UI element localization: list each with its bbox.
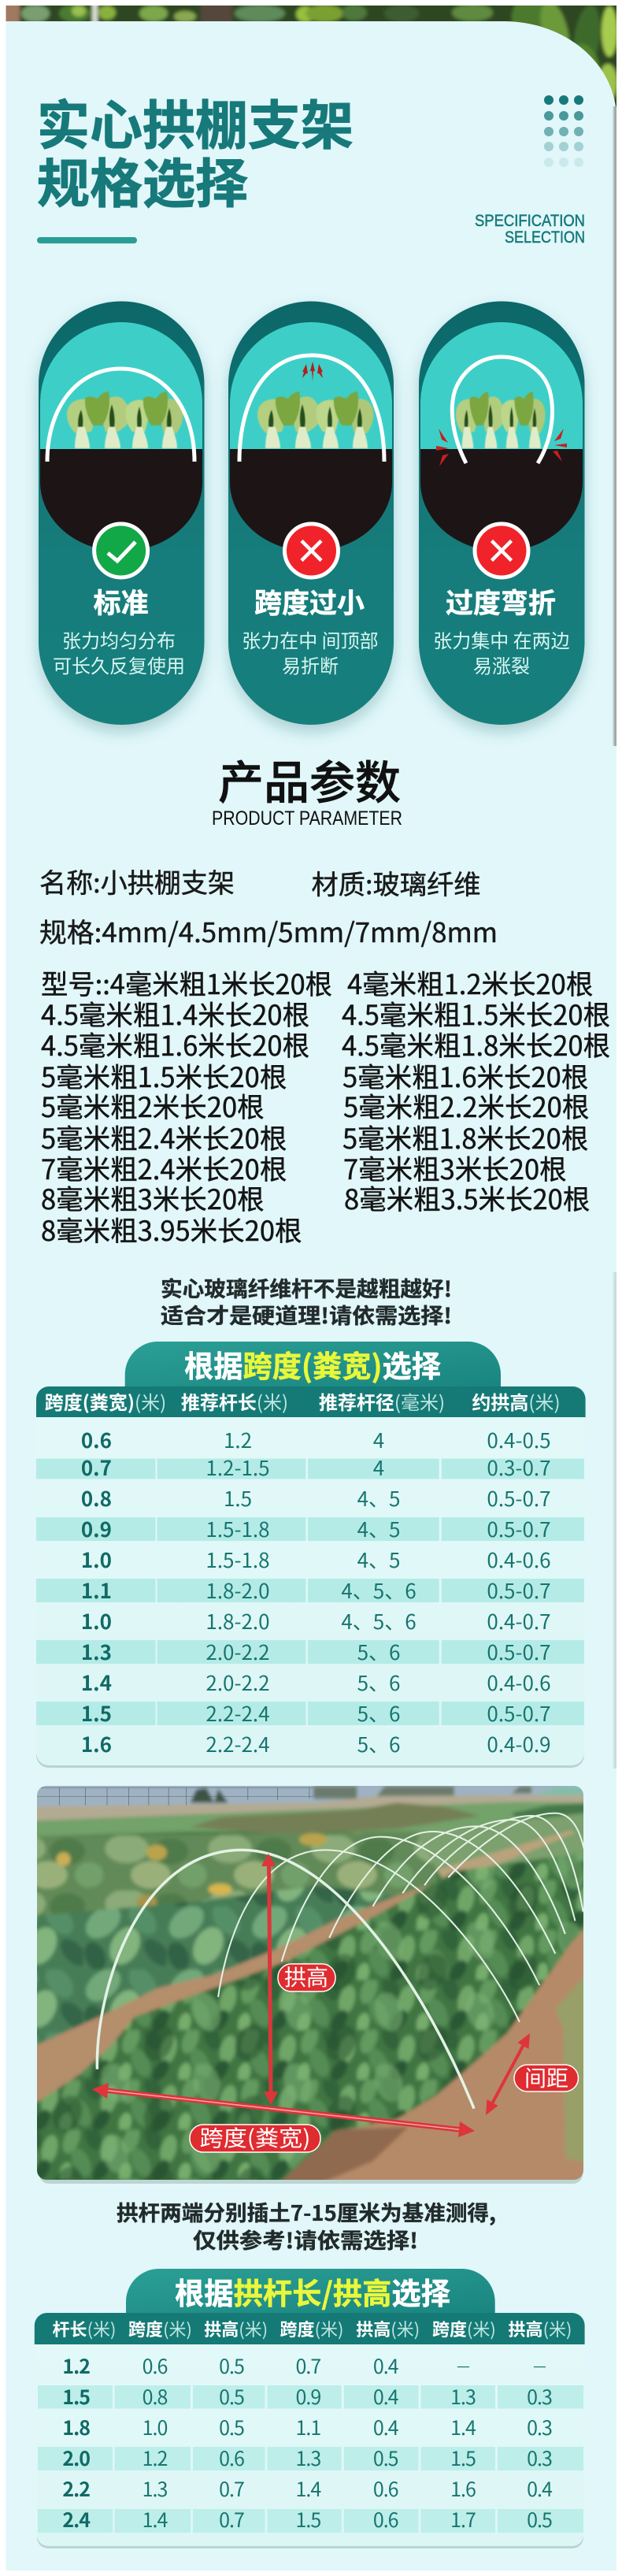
table rows: 4、5、6 [341, 1576, 417, 1605]
table rows: 1.5 [450, 2444, 476, 2472]
table rows: 1.6 [81, 1729, 112, 1758]
tab heading: 根据跨度(粪宽)选择 [184, 1342, 441, 1386]
text: span too small description: 张力在中 间顶部 [242, 625, 379, 653]
english subtitle: SELECTION [505, 228, 585, 247]
table rows: 0.4 [373, 2382, 399, 2411]
table rows: 0.4 [527, 2474, 553, 2503]
table rows: 2.0-2.2 [205, 1668, 270, 1697]
table rows: — [533, 2355, 546, 2376]
english subtitle: SPECIFICATION [475, 212, 585, 230]
table rows: 5、6 [357, 1729, 400, 1758]
arrow: spacing [486, 2033, 530, 2115]
table rows: 0.7 [219, 2505, 244, 2533]
table rows: 0.7 [219, 2474, 244, 2503]
heading: product parameters: 产品参数 [218, 746, 401, 812]
icon: bok choy plants [257, 392, 373, 448]
table header: 跨度(米) [128, 2316, 192, 2341]
table rows: 0.6 [81, 1425, 112, 1454]
table rows: 1.3 [450, 2382, 476, 2411]
table header: 约拱高(米) [472, 1387, 561, 1415]
text block: model list: 型号::4毫米粗1米长20根 [41, 963, 332, 1002]
table rows: 1.2 [143, 2444, 167, 2472]
table rows: 1.4 [450, 2413, 476, 2441]
arch: over-bent curve [452, 357, 553, 463]
table rows: 0.4 [373, 2351, 399, 2380]
text block: product specs [39, 862, 498, 950]
arrow: span width [92, 2083, 475, 2137]
table rows: 1.4 [81, 1668, 112, 1697]
table rows: 5、6 [357, 1668, 400, 1697]
text: over bending description: 易涨裂 [473, 651, 530, 678]
table header [35, 2313, 585, 2344]
text: over bending description [433, 625, 570, 678]
text: over bending description: 张力集中 在两边 [433, 625, 570, 653]
tab heading [125, 1342, 501, 1386]
table: selection by rod length and arch height [35, 2269, 585, 2548]
icon: bok choy plants [67, 392, 183, 448]
arch: even curve [47, 369, 194, 462]
table rows: 2.4 [62, 2505, 91, 2533]
callout: measurement note: 仅供参考!请依需选择! [193, 2224, 418, 2255]
table card [37, 2340, 583, 2548]
table rows: 4 [373, 1453, 384, 1482]
title [37, 84, 354, 218]
table rows: 1.0 [81, 1606, 112, 1635]
table rows: 1.8 [62, 2413, 90, 2441]
callout: measurement note [117, 2196, 496, 2255]
text block: model list: 5毫米粗2.4米长20根 [41, 1117, 287, 1156]
table rows: 0.4-0.5 [487, 1425, 551, 1454]
table rows: 1.0 [81, 1545, 112, 1574]
table rows: 4、5 [357, 1514, 400, 1543]
row bands [38, 2385, 583, 2533]
text block: model list: 5毫米粗1.6米长20根 [342, 1056, 588, 1095]
arrow: arch height [261, 1854, 278, 2105]
table header: 跨度(米) [280, 2316, 343, 2341]
callout: thickness note: 实心玻璃纤维杆不是越粗越好! [161, 1272, 452, 1303]
table header [36, 1386, 586, 1417]
table rows: 0.7 [296, 2351, 320, 2380]
table rows: 0.6 [143, 2351, 167, 2380]
icon: red stress arrows at top [302, 362, 323, 381]
table rows: 0.3 [527, 2413, 552, 2441]
table rows: 0.3-0.7 [487, 1453, 551, 1482]
text: standard description [53, 625, 185, 678]
text block: product specs: 规格:4mm/4.5mm/5mm/7mm/8mm [39, 911, 498, 950]
table rows: 0.4-0.6 [487, 1668, 551, 1697]
table rows: 1.6 [450, 2474, 476, 2503]
table rows: 1.2-1.5 [205, 1453, 270, 1482]
title: 规格选择 [37, 142, 248, 218]
icon: bok choy plants [456, 392, 546, 448]
table rows: 0.6 [373, 2474, 398, 2503]
table rows: 1.7 [450, 2505, 476, 2533]
table rows [81, 1425, 551, 1758]
arch: tall narrow curve [239, 355, 384, 462]
table rows: 1.0 [143, 2413, 167, 2441]
table rows: 0.5 [527, 2505, 552, 2533]
label: spacing [514, 2062, 578, 2093]
table rows: 4 [373, 1425, 384, 1454]
heading: standard: 标准 [94, 581, 149, 622]
table rows: 5、6 [357, 1637, 400, 1666]
table rows: 1.2 [62, 2351, 90, 2380]
photo: field with arch supports [24, 1780, 595, 2190]
text block: model list: 5毫米粗1.5米长20根 [41, 1056, 287, 1095]
table rows: 0.5-0.7 [487, 1576, 551, 1605]
table header: 跨度(粪宽)(米) [45, 1387, 166, 1415]
callout: thickness note [161, 1272, 452, 1330]
table rows: 1.2 [224, 1425, 252, 1454]
callout: measurement note: 拱杆两端分别插土7-15厘米为基准测得, [117, 2196, 496, 2227]
table rows: — [457, 2355, 470, 2376]
table rows: 0.4 [373, 2413, 399, 2441]
text: span too small description [242, 625, 379, 678]
callout: thickness note: 适合才是硬道理!请依需选择! [161, 1299, 452, 1330]
panel: span too small [228, 301, 394, 725]
table rows: 0.5 [219, 2382, 244, 2411]
panel: over bending [419, 301, 584, 725]
table rows: 0.5 [219, 2413, 244, 2441]
heading: span too small: 跨度过小 [254, 581, 365, 622]
heading: product parameters: PRODUCT PARAMETER [212, 807, 402, 830]
text block: model list: 4.5毫米粗1.4米长20根 [41, 993, 309, 1033]
text block: model list: 5毫米粗1.8米长20根 [342, 1117, 588, 1156]
table header: 拱高(米) [356, 2316, 420, 2341]
table rows: 2.2 [62, 2474, 90, 2503]
table rows: 1.1 [81, 1576, 112, 1605]
text block: model list: 8毫米粗3.95米长20根 [41, 1209, 302, 1249]
table rows: 1.5-1.8 [205, 1514, 270, 1543]
panel: standard [39, 301, 205, 725]
table rows: 0.5-0.7 [487, 1637, 551, 1666]
icon: green check [94, 524, 148, 577]
icon: red cross [475, 524, 528, 577]
table header: 推荐杆长(米) [181, 1387, 288, 1415]
icon: red stress sparks [436, 429, 567, 466]
table header: 拱高(米) [204, 2316, 268, 2341]
table rows: 0.9 [296, 2382, 320, 2411]
label: spacing: 间距 [524, 2062, 568, 2093]
table rows: 0.3 [527, 2444, 552, 2472]
table rows: 4、5、6 [341, 1606, 417, 1635]
text: span too small description: 易折断 [282, 651, 339, 678]
table rows: 0.5-0.7 [487, 1698, 551, 1728]
table rows: 1.3 [296, 2444, 320, 2472]
title underline bar [37, 237, 137, 243]
table rows: 1.8-2.0 [205, 1576, 270, 1605]
table rows: 0.4-0.6 [487, 1545, 551, 1574]
label: span: 跨度(粪宽) [200, 2121, 310, 2153]
table: selection by span [36, 1342, 586, 1768]
table rows: 0.4-0.9 [487, 1729, 551, 1758]
text block: model list: 4毫米粗1.2米长20根 [347, 963, 593, 1002]
table rows: 0.4-0.7 [487, 1606, 551, 1635]
arches [97, 1850, 474, 2109]
text block: model list [41, 963, 610, 1249]
text block: model list: 5毫米粗2米长20根 [41, 1086, 265, 1125]
table rows [62, 2351, 553, 2533]
text: standard description: 可长久反复使用 [53, 651, 185, 678]
title: 实心拱棚支架 [37, 84, 354, 160]
table rows: 1.5 [224, 1483, 252, 1513]
label: arch height: 拱高 [284, 1961, 328, 1992]
table rows: 0.6 [219, 2444, 244, 2472]
text block: model list: 4.5毫米粗1.5米长20根 [342, 993, 610, 1033]
text block: model list: 4.5毫米粗1.8米长20根 [342, 1024, 610, 1063]
table rows: 0.5 [219, 2351, 244, 2380]
table header: 杆长(米) [53, 2316, 116, 2341]
table card [36, 1414, 584, 1768]
table rows: 1.5 [81, 1698, 112, 1728]
table rows: 0.5-0.7 [487, 1483, 551, 1513]
table rows: 2.2-2.4 [205, 1698, 270, 1728]
table rows: 4、5 [357, 1545, 400, 1574]
row bands [36, 1459, 584, 1725]
table rows: 2.2-2.4 [205, 1729, 270, 1758]
text block: model list: 7毫米粗2.4米长20根 [41, 1148, 287, 1187]
table rows: 0.8 [143, 2382, 167, 2411]
table header: 拱高(米) [509, 2316, 572, 2341]
tab heading: 根据拱杆长/拱高选择 [175, 2270, 450, 2313]
table rows: 1.5 [296, 2505, 320, 2533]
table rows: 4、5 [357, 1483, 400, 1513]
text block: model list: 7毫米粗3米长20根 [343, 1148, 567, 1187]
table rows: 1.3 [143, 2474, 167, 2503]
text block: model list: 8毫米粗3米长20根 [41, 1178, 265, 1217]
heading: over bending: 过度弯折 [446, 581, 556, 622]
icon: red cross [285, 524, 339, 577]
table rows: 0.5-0.7 [487, 1514, 551, 1543]
table rows: 2.0-2.2 [205, 1637, 270, 1666]
text block: product specs: 名称:小拱棚支架 [39, 862, 235, 900]
text block: product specs: 材质:玻璃纤维 [312, 863, 480, 902]
text: standard description: 张力均匀分布 [62, 625, 176, 653]
table rows: 0.3 [527, 2382, 552, 2411]
table rows: 0.6 [373, 2505, 398, 2533]
text block: model list: 5毫米粗2.2米长20根 [343, 1086, 589, 1125]
table rows: 1.4 [143, 2505, 168, 2533]
table header: 推荐杆径(毫米) [319, 1387, 445, 1415]
table rows: 1.4 [296, 2474, 321, 2503]
table rows: 1.5 [62, 2382, 90, 2411]
table rows: 1.8-2.0 [205, 1606, 270, 1635]
text block: model list: 8毫米粗3.5米长20根 [344, 1178, 590, 1217]
table header: 跨度(米) [432, 2316, 496, 2341]
table rows: 2.0 [62, 2444, 90, 2472]
table rows: 0.8 [81, 1483, 112, 1513]
table rows: 0.9 [81, 1514, 112, 1543]
table rows: 1.1 [296, 2413, 320, 2441]
table rows: 0.7 [81, 1453, 112, 1482]
background photo strip: leaves [6, 6, 616, 106]
table rows: 1.3 [81, 1637, 112, 1666]
english subtitle [475, 212, 585, 247]
table rows: 5、6 [357, 1698, 400, 1728]
decorative dot grid [544, 95, 583, 167]
text block: model list: 4.5毫米粗1.6米长20根 [41, 1024, 309, 1063]
table rows: 0.5 [373, 2444, 398, 2472]
table rows: 1.5-1.8 [205, 1545, 270, 1574]
